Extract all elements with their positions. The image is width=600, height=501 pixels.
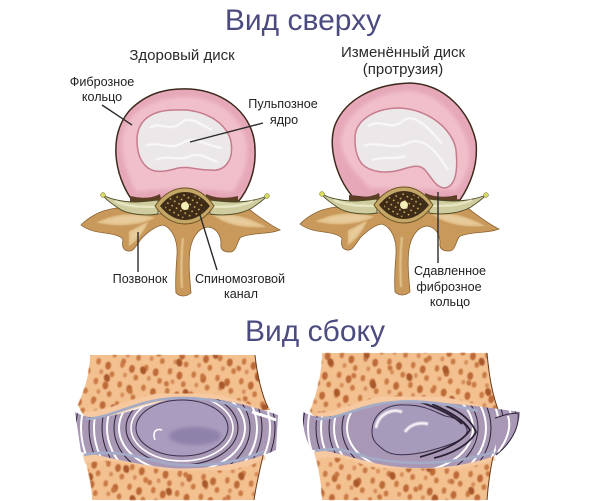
- vertebra changed: [300, 187, 499, 295]
- protrusion disc illustration: [300, 83, 499, 295]
- nucleus folds healthy: [146, 120, 222, 162]
- nucleus pulposus healthy: [137, 110, 232, 171]
- title: side view: Вид сбоку: [245, 315, 385, 348]
- nucleus folds changed: [364, 118, 448, 170]
- nucleus healthy: [136, 400, 228, 456]
- inner pink highlight changed: [341, 91, 469, 190]
- label: annulus fibrosus: кольцо: [82, 90, 122, 104]
- nucleus protrusion: [372, 405, 467, 455]
- heading: changed disc: [341, 44, 465, 78]
- small tear healthy: [252, 412, 276, 420]
- label: compressed annulus: фиброзное: [416, 280, 482, 294]
- title: top view: Вид сверху: [225, 4, 381, 37]
- label: vertebra: [113, 232, 168, 286]
- label: compressed annulus: Сдавленное: [414, 264, 486, 278]
- label: compressed annulus: [414, 192, 486, 309]
- endplates protrusion: [315, 401, 494, 463]
- label: spinal canal: канал: [224, 287, 258, 301]
- heading: changed disc: Изменённый диск: [341, 44, 465, 61]
- label: compressed annulus: кольцо: [430, 295, 470, 309]
- label: nucleus pulposus: [190, 97, 318, 142]
- compressed lamellae: [420, 402, 476, 458]
- lower bone healthy: [84, 451, 264, 500]
- label: annulus fibrosus: Фиброзное: [70, 75, 134, 89]
- annulus fibrosus healthy: [116, 89, 255, 204]
- heading: changed disc: (протрузия): [363, 61, 443, 78]
- disc lamellae protrusion: [302, 402, 520, 468]
- label: spinal canal: Спиномозговой: [195, 272, 285, 286]
- label: nucleus pulposus: ядро: [270, 113, 298, 127]
- upper bone protrusion: [310, 353, 500, 419]
- nucleus highlights protrusion: [376, 411, 428, 432]
- heading: healthy disc: Здоровый диск: [129, 47, 235, 64]
- label: vertebra: Позвонок: [113, 272, 168, 286]
- nucleus changed: [355, 108, 457, 188]
- upper bone healthy: [78, 355, 270, 418]
- vertebra healthy: [81, 188, 280, 296]
- annulus fibrosus changed: [332, 83, 476, 202]
- label: spinal canal: [195, 215, 285, 301]
- endplates healthy: [84, 398, 264, 465]
- lower bone protrusion: [315, 448, 494, 500]
- disc lamellae healthy: [75, 398, 278, 468]
- side view healthy: [75, 354, 278, 501]
- bulge fragment: [495, 413, 518, 455]
- side view protrusion: [302, 352, 520, 501]
- healthy disc illustration: [81, 89, 280, 296]
- label: nucleus pulposus: Пульпозное: [248, 97, 318, 111]
- label: annulus fibrosus: [70, 75, 134, 125]
- inner pink highlight: [122, 97, 247, 192]
